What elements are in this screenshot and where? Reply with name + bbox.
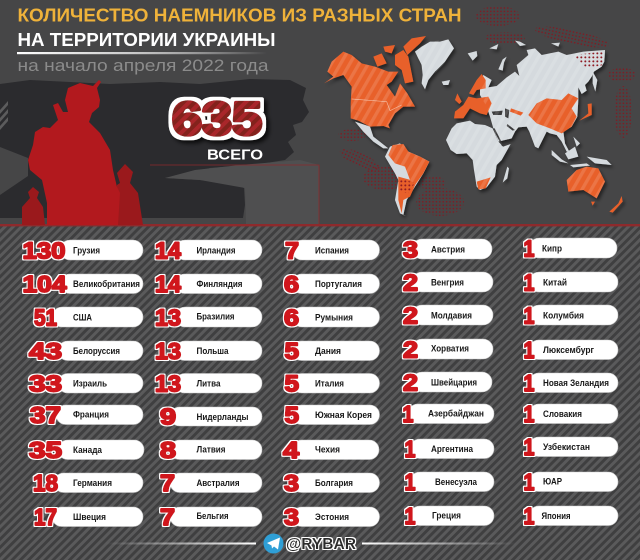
list row: Новая Зеландия [524,370,618,396]
list row: Япония [524,503,618,529]
list row: Испания: Испания [315,245,349,256]
new zealand [609,196,623,213]
list background [0,226,640,560]
georgia [510,108,523,116]
list row: Австрия [403,236,492,262]
list row: Азербайджан: Азербайджан [428,408,484,420]
list row: Дания: 5 [284,338,299,364]
list row: Венесуэла [404,469,494,495]
list row: Ирландия [155,237,262,263]
footer rule right [362,542,517,544]
list row: Япония: 1 [524,503,535,529]
list row: Хорватия [403,336,493,362]
list row: Эстония: Эстония [315,512,349,523]
list row: Румыния: 6 [284,304,299,330]
list row: Бразилия: Бразилия [196,312,234,322]
kamchatka [593,72,597,92]
list row: Колумбия [524,302,618,328]
list row: Нидерланды: 9 [160,404,176,430]
list row: Швейцария: Швейцария [431,377,477,388]
accent stripes [0,101,8,130]
list row: Венгрия: 2 [403,269,418,295]
china [528,93,578,133]
list row: Германия [33,470,143,496]
mexico [355,122,388,148]
list row: Испания: 7 [285,237,299,263]
list row: Австралия: Австралия [196,478,240,489]
arctic islands [442,41,560,85]
list row: Венесуэла: Венесуэла [435,477,478,488]
list row: Болгария: Болгария [315,478,353,489]
britain [455,93,462,104]
stripes on land [324,39,605,198]
list row: Австралия [160,470,262,496]
list row: Азербайджан: 1 [402,401,414,427]
list row: Болгария [284,470,380,496]
list row: Южная Корея: Южная Корея [315,410,372,421]
subtitle: на начало апреля 2022 года [18,56,269,75]
argentina [398,177,417,213]
list row: Италия: Италия [315,378,344,390]
list row: Литва: Литва [196,378,221,390]
australia [567,167,605,198]
list row: Аргентина: Аргентина [431,444,474,455]
list row: Молдавия: Молдавия [431,310,472,321]
greenland [415,39,454,89]
list row: США [34,304,143,330]
list row: Австрия: Австрия [431,244,465,255]
list row: Азербайджан [402,401,494,427]
list row: Чехия [283,437,379,463]
list row: Узбекистан [524,434,618,460]
list row: Польша: Польша [196,346,229,357]
list row: Грузия: 130 [22,237,66,263]
list row: Германия: 18 [33,470,58,496]
list row: Португалия: Португалия [315,279,362,290]
list row: ЮАР: ЮАР [543,476,563,488]
japan [579,103,592,121]
list row: Латвия: 8 [160,437,176,463]
list row: Эстония [284,504,380,530]
title line 1: КОЛИЧЕСТВО НАЕМНИКОВ ИЗ РАЗНЫХ СТРАН [18,6,461,26]
iceland [468,51,477,61]
list row: Канада: Канада [73,445,103,456]
world map [324,36,623,216]
list row: Болгария: 3 [284,470,299,496]
list row: Швеция [34,504,143,530]
us canada border [352,99,402,111]
list row: Новая Зеландия: 1 [524,370,535,396]
light brush patch [165,160,319,224]
list row: Япония: Япония [542,511,570,522]
madagascar [503,167,509,183]
list row: Молдавия [403,302,493,328]
list row: Израиль [29,370,143,396]
list row: Аргентина [404,436,494,462]
list row: Венгрия: Венгрия [431,277,464,288]
europe [454,97,492,118]
list row: Белоруссия: 43 [29,338,62,364]
south america [385,143,429,216]
list row: Греция [404,503,494,529]
list row: Швеция: Швеция [73,512,106,523]
brazil colombia venezuela [388,144,429,185]
list row: Белоруссия [29,338,143,364]
list row: Греция: Греция [432,510,461,522]
list row: Румыния [284,304,380,330]
list row: Дания [284,338,380,364]
list row: Израиль: Израиль [73,378,107,390]
list row: Хорватия: Хорватия [431,344,469,354]
list row: Узбекистан: 1 [524,434,535,460]
north america [324,52,415,128]
dark brush band [0,79,309,218]
list row: Швеция: 17 [34,504,57,530]
list row: Израиль: 33 [29,370,62,396]
title rule [17,52,267,54]
list row: Италия [284,370,380,396]
footer [105,534,517,554]
list row: Белоруссия: Белоруссия [73,346,120,357]
list row: Кипр [524,235,617,261]
list row: Южная Корея: 5 [284,402,299,428]
list row: Финляндия [155,271,262,297]
canadian arctic [373,36,426,83]
number 635: 635 [172,92,262,144]
title line 2: НА ТЕРРИТОРИИ УКРАИНЫ [18,30,276,50]
header background [0,0,640,226]
list row: Кипр: Кипр [542,243,562,254]
list row: Молдавия: 2 [403,302,418,328]
halftone dots around map [337,6,636,216]
list row: Узбекистан: Узбекистан [543,442,590,453]
list row: Канада [29,437,144,463]
list row: Бельгия [160,504,262,530]
list row: Китай [524,269,618,295]
list row: Канада: 35 [29,437,62,463]
list row: США: США [73,312,92,323]
south africa [477,177,491,189]
list row: Колумбия: 1 [524,302,535,328]
list row: Польша: 13 [155,338,181,364]
red frame line [150,165,319,225]
list row: Италия: 5 [284,370,299,396]
list row: Латвия: Латвия [196,444,226,456]
list row: Австрия: 3 [403,236,418,262]
list row: Люксембург [524,337,618,363]
list row: Венесуэла: 1 [404,469,416,495]
list row: Греция: 1 [404,503,416,529]
list row: Польша [155,338,262,364]
list row: Словакия [524,401,618,427]
list row: Великобритания: Великобритания [73,279,140,290]
list row: Франция: 37 [30,402,61,428]
list row: Франция: Франция [73,410,109,420]
total counter [172,92,263,164]
icon: telegram [264,534,284,554]
list row: США: 51 [34,304,57,330]
list row: Португалия [284,271,380,297]
list row: Словакия: 1 [524,401,535,427]
dots on argentina [397,178,415,193]
list row: Эстония: 3 [284,504,299,530]
list row: Литва: 13 [155,370,181,396]
list row: Хорватия: 2 [403,336,418,362]
list row: Латвия [160,437,262,463]
inland seas [492,108,515,147]
list row: Люксембург: 1 [524,337,535,363]
list row: Чехия: Чехия [315,444,340,456]
list row: Новая Зеландия: Новая Зеландия [543,378,609,389]
list row: ЮАР: 1 [524,469,535,495]
list row: Словакия: Словакия [543,409,582,420]
icon: soldier silhouettes [22,80,143,225]
dots on siberia [573,52,603,68]
list row: Литва [155,370,262,396]
novaya zemlya [498,57,507,71]
list row: Нидерланды [160,404,262,430]
list row: Франция [30,402,143,428]
africa [446,121,511,190]
list row: Швейцария: 2 [403,369,418,395]
list row: Бразилия: 13 [155,304,181,330]
list row: Великобритания: 104 [22,271,67,297]
list row: Южная Корея [284,402,380,428]
list row: Чехия: 4 [283,437,299,463]
list row: Китай: 1 [524,269,535,295]
list row: Китай: Китай [543,277,567,288]
scandinavia [469,74,486,95]
red base line [0,224,640,226]
list row: Финляндия: Финляндия [196,279,242,290]
list row: Португалия: 6 [284,271,299,297]
list row: Грузия [22,237,143,263]
list row: Аргентина: 1 [404,436,416,462]
list row: Колумбия: Колумбия [543,310,584,321]
list row: Люксембург: Люксембург [543,345,594,356]
list row: Дания: Дания [315,346,341,357]
tasmania [591,202,595,206]
list row: Грузия: Грузия [73,245,100,256]
eurasia [480,48,605,152]
list row: Австралия: 7 [160,470,175,496]
list row: Швейцария [403,369,492,395]
list row: Кипр: 1 [524,235,535,261]
list row: Германия: Германия [73,478,112,489]
list row: Финляндия: 14 [155,271,181,297]
list row: ЮАР [524,469,618,495]
southeast asia islands [552,137,612,167]
list row: Ирландия: 14 [155,237,181,263]
label total: ВСЕГО [207,148,263,164]
list row: Нидерланды: Нидерланды [196,412,248,423]
footer rule left [105,542,256,544]
handle: @RYBAR [286,536,356,553]
list row: Великобритания [22,271,143,297]
list row: Венгрия [403,269,493,295]
list row: Испания [285,237,380,263]
list row: Бразилия [155,304,262,330]
list row: Румыния: Румыния [315,312,353,323]
list row: Бельгия: 7 [160,504,175,530]
list row: Бельгия: Бельгия [196,511,228,522]
list row: Ирландия: Ирландия [196,245,236,256]
